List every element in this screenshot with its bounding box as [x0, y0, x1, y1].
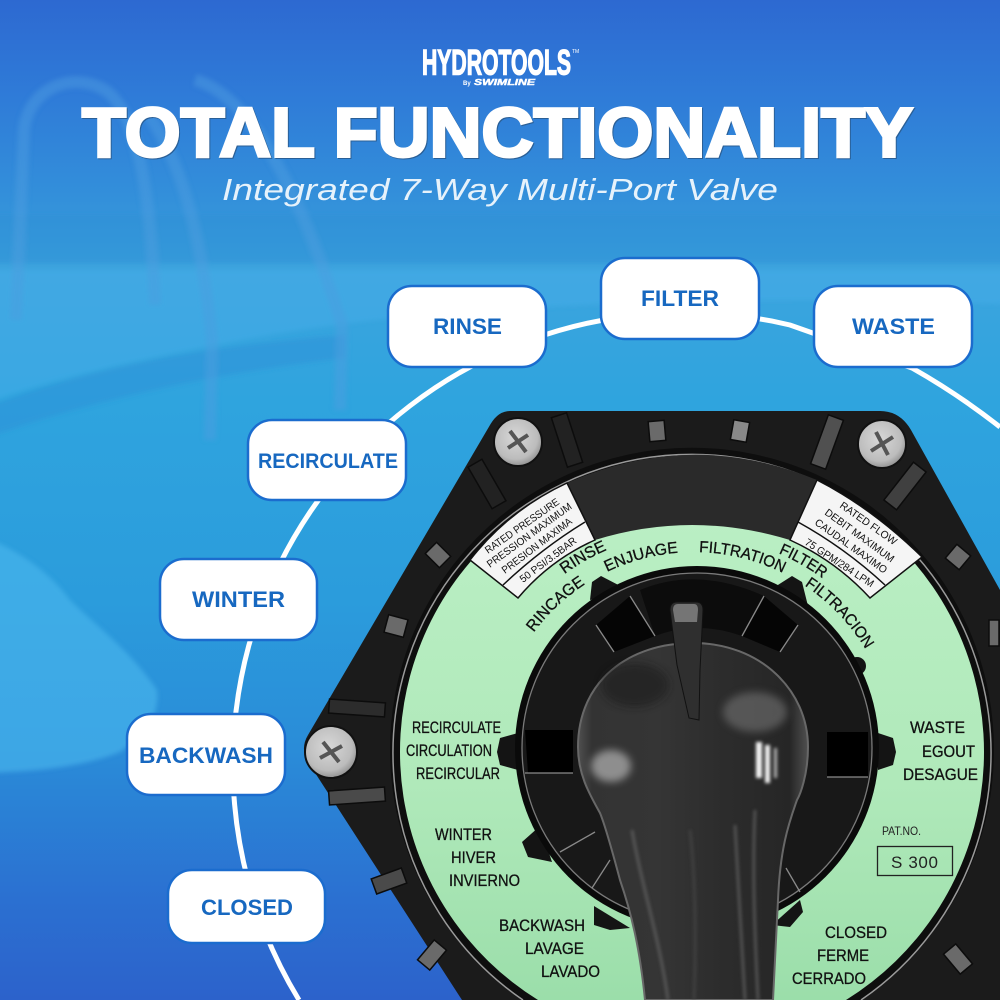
label: RECIRCULATE — [248, 420, 406, 500]
dial text: backwash: BACKWASH — [499, 916, 585, 935]
curved dial text: ENJUAGE — [604, 542, 678, 572]
dial text: closed: CERRADO — [792, 969, 866, 988]
dial text: backwash — [499, 916, 600, 981]
label: RECIRCULATE: RECIRCULATE — [258, 450, 398, 473]
label: WASTE — [814, 286, 972, 367]
rated pressure label — [470, 483, 595, 598]
dial text: waste: WASTE — [910, 718, 965, 737]
label: CLOSED — [168, 870, 325, 943]
position notches — [497, 576, 896, 930]
dial text: closed: FERME — [817, 946, 869, 965]
label: WINTER: WINTER — [192, 587, 285, 612]
label: WINTER — [160, 559, 317, 640]
label: WASTE: WASTE — [852, 314, 935, 339]
subtitle: Integrated 7-Way Multi-Port Valve — [222, 172, 778, 207]
rated flow label: DEBIT MAXIMUM — [822, 507, 896, 565]
dial text: recirculate: RECIRCULATE — [412, 718, 501, 737]
rated flow label: CAUDAL MAXIMO — [812, 517, 889, 576]
rated flow label: RATED FLOW — [837, 500, 899, 548]
label: RINSE — [388, 286, 546, 367]
valve body: black hexagon — [304, 411, 1000, 1000]
dial face: green — [400, 460, 984, 1000]
curved dial text: FILTER — [780, 543, 827, 578]
logo: Hydrotools by Swimline: SWIMLINE — [474, 78, 536, 87]
dial text: backwash: LAVAGE — [525, 939, 584, 958]
screw: top left — [494, 418, 542, 466]
multi-port valve — [304, 411, 1000, 1000]
logo: Hydrotools by Swimline: TM — [572, 49, 579, 55]
screw: top right — [858, 420, 906, 468]
title: TOTAL FUNCTIONALITY — [82, 94, 913, 172]
label: RINSE: RINSE — [433, 314, 502, 339]
dark upper sector — [567, 455, 817, 540]
curved dial text: RINSE — [559, 540, 606, 574]
curved dial text: FILTRACION — [805, 576, 874, 648]
handle dome and grip — [578, 643, 808, 1000]
dial text: recirculate — [406, 718, 501, 783]
label: BACKWASH — [127, 714, 285, 795]
dial text: closed — [792, 923, 887, 988]
dial text: recirculate: CIRCULATION — [406, 741, 492, 760]
curved dial text: RINCAGE — [526, 575, 585, 632]
rated pressure label: 50 PSI/3.5BAR — [518, 535, 579, 585]
curved dial text — [526, 540, 874, 648]
label: FILTER — [601, 258, 759, 339]
logo: Hydrotools by Swimline: By — [463, 81, 471, 87]
rated flow label: 75 GPM/284 LPM — [802, 536, 876, 590]
dial text: waste: DESAGUE — [903, 765, 978, 784]
rated pressure label: RATED PRESSURE — [483, 496, 562, 556]
dial text: waste: EGOUT — [922, 742, 975, 761]
bezel tabs — [329, 413, 999, 974]
logo: Hydrotools by Swimline: HYDROTOOLS — [422, 44, 571, 82]
logo: Hydrotools by Swimline — [422, 44, 579, 87]
patent number box: S 300 — [891, 853, 938, 872]
dial text: winter: HIVER — [451, 848, 496, 867]
label: FILTER: FILTER — [641, 286, 719, 311]
inner dial wheel — [515, 566, 879, 930]
dial text: closed: CLOSED — [825, 923, 887, 942]
rated flow label — [790, 480, 922, 598]
screw: left — [305, 726, 357, 778]
dial text: recirculate: RECIRCULAR — [416, 764, 500, 783]
curved dial text: FILTRATION — [700, 541, 786, 572]
handle pointer — [670, 602, 703, 720]
patent number box — [878, 824, 952, 876]
dial ring — [390, 448, 994, 1000]
dial text: backwash: LAVADO — [541, 962, 600, 981]
label: CLOSED: CLOSED — [201, 895, 293, 920]
patent number box: PAT.NO. — [882, 824, 921, 838]
dial text: winter: INVIERNO — [449, 871, 520, 890]
connecting arc — [233, 313, 1000, 1000]
rated pressure label: PRESION MAXIMA — [500, 516, 575, 576]
dial text: waste — [903, 718, 978, 784]
dial text: winter — [435, 825, 520, 890]
label: BACKWASH: BACKWASH — [139, 743, 273, 768]
dial text: winter: WINTER — [435, 825, 492, 844]
rated pressure label: PRESSION MAXIMUM — [485, 501, 574, 570]
